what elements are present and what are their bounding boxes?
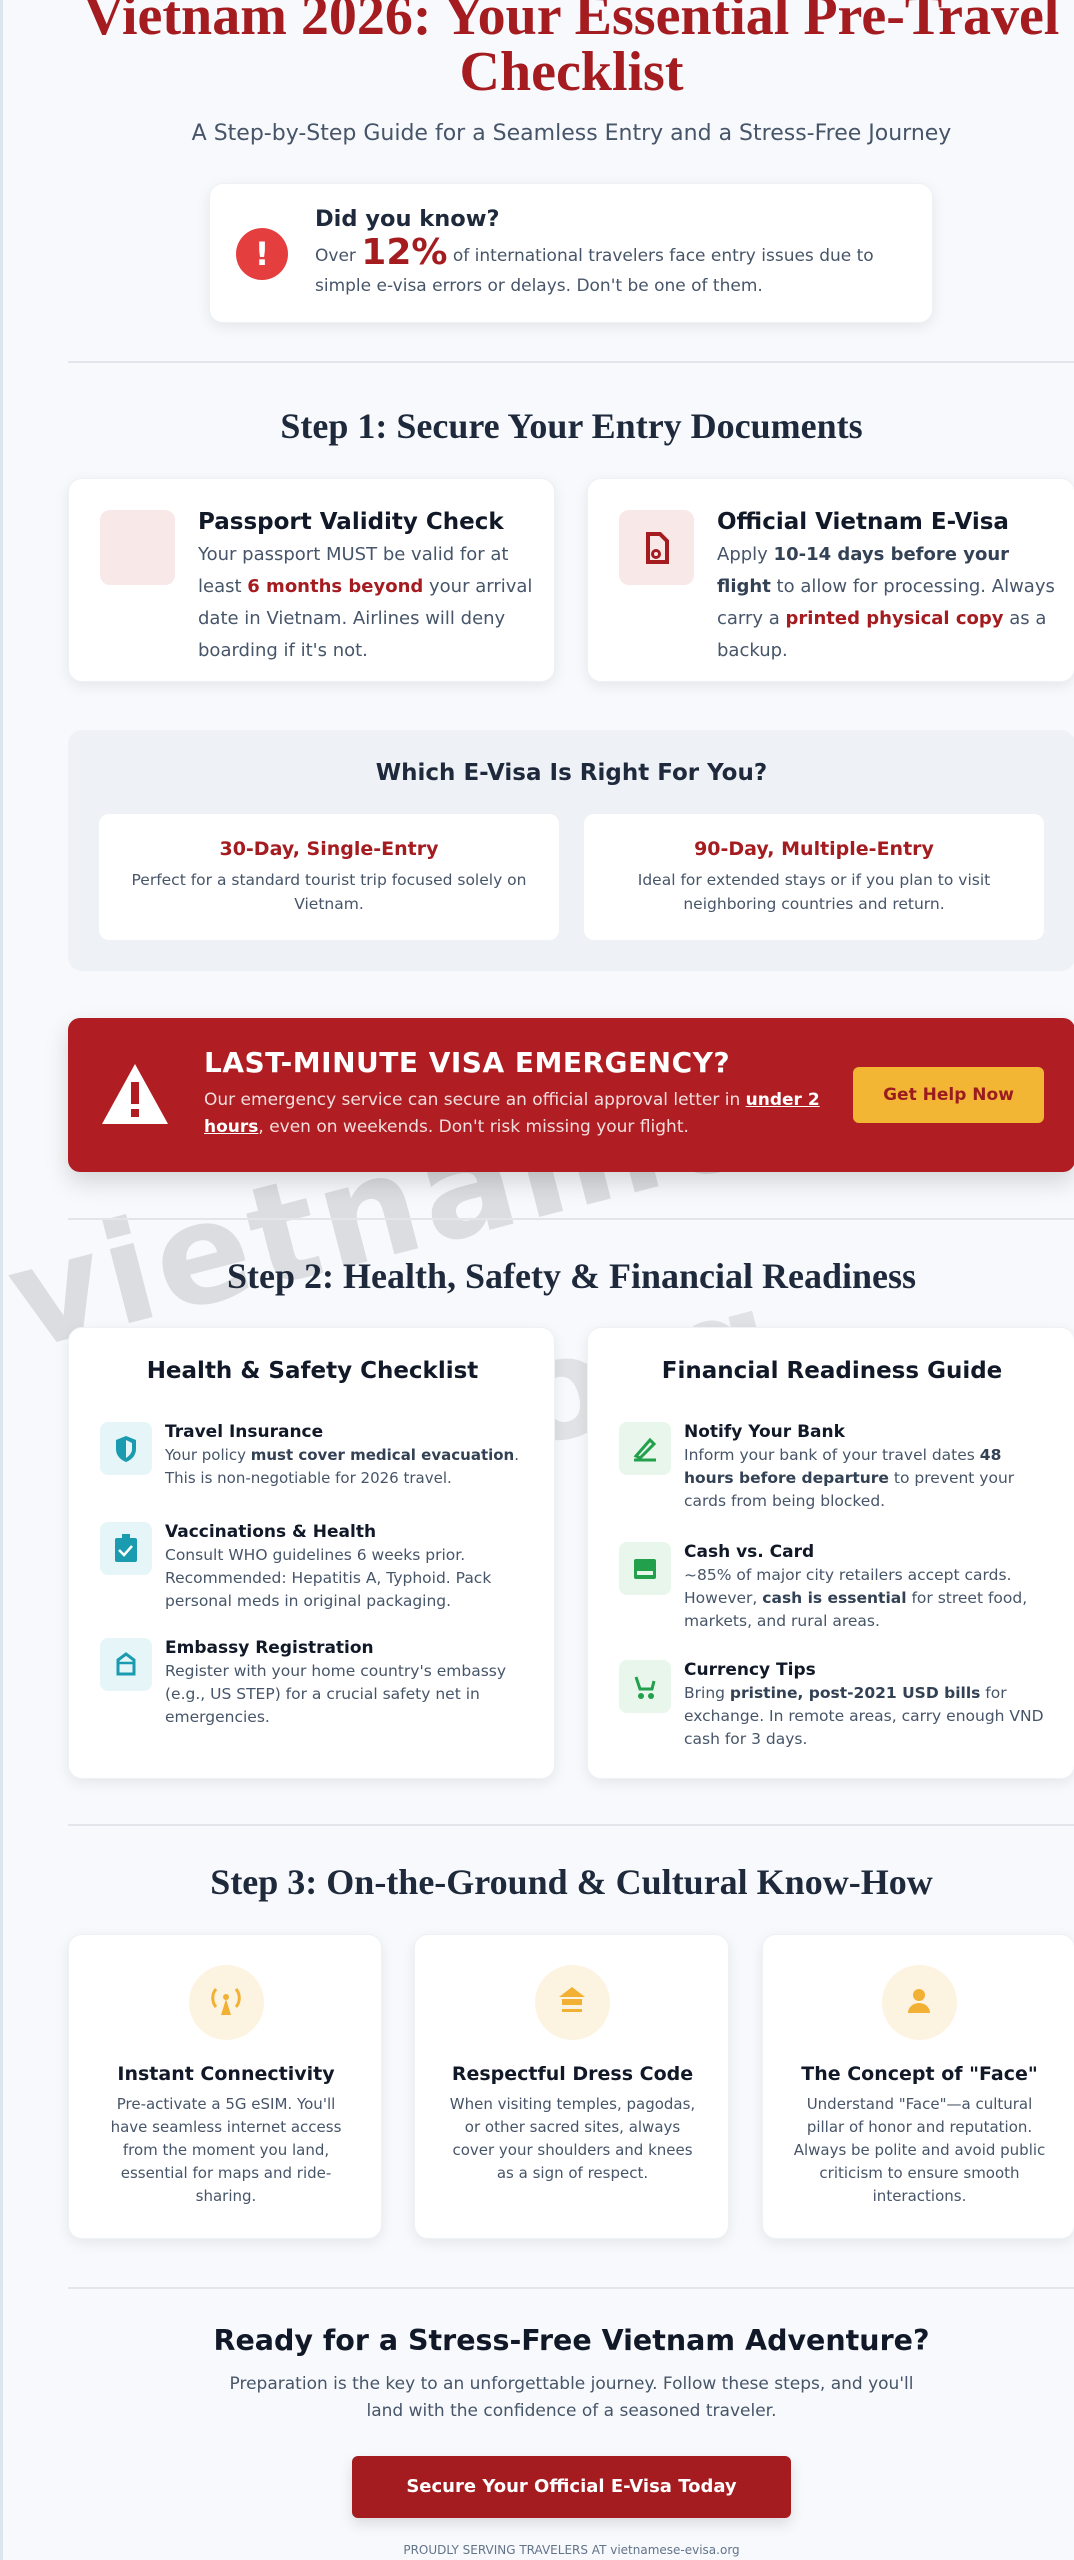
panel heading: Which E-Visa Is Right For You? (376, 760, 767, 786)
option: 90-day (584, 814, 1044, 940)
passport text: Passport Validity Check (198, 509, 504, 535)
item: embassy: Register with your home country's embassy (e.g., US STEP) for a crucial safety net in emergencies. (165, 1662, 506, 1726)
option: 30-day: Perfect for a standard tourist trip focused solely on Vietnam. (131, 871, 526, 913)
card: connectivity (68, 1934, 382, 2239)
option: 90-day: 90-Day, Multiple-Entry (694, 838, 934, 860)
face text: The Concept of "Face" (801, 2063, 1038, 2085)
item: bank: Inform your bank of your travel dates 48 hours before departure to prevent your cards from being blocked. (684, 1446, 1014, 1510)
item: bank: Notify Your Bank (684, 1422, 845, 1442)
connectivity text: Instant Connectivity (117, 2063, 335, 2085)
item: currency: Bring pristine, post-2021 USD bills for exchange. In remote areas, carry enough VND cash for 3 days. (684, 1684, 1044, 1748)
option: 30-day (99, 814, 559, 940)
heading: step 2: Step 2: Health, Safety & Financial Readiness (227, 1256, 916, 1296)
subtitle: A Step-by-Step Guide for a Seamless Entry and a Stress-Free Journey (192, 121, 951, 146)
panel: financial (587, 1327, 1074, 1779)
card: passport (68, 478, 555, 682)
panel: health (68, 1327, 555, 1779)
panel heading: Financial Readiness Guide (662, 1358, 1002, 1384)
text: evisa.org (43, 1257, 791, 1598)
emergency text: LAST-MINUTE VISA EMERGENCY? (204, 1046, 730, 1079)
callout: did you know (209, 183, 933, 323)
item: embassy (100, 1638, 506, 1726)
heading: closing: Ready for a Stress-Free Vietnam Adventure? (214, 2324, 930, 2357)
connectivity text: Pre-activate a 5G eSIM. You'll have seamless internet access from the moment you land, essential for maps and ride-sharing. (111, 2095, 341, 2205)
item: cash (619, 1542, 1027, 1630)
panel heading: Health & Safety Checklist (147, 1358, 478, 1384)
dress code text: Respectful Dress Code (452, 2063, 693, 2085)
callout text: Over 12% of international travelers face entry issues due to simple e-visa errors or delays. Don't be one of them. (315, 232, 874, 296)
icon: passport (100, 510, 175, 585)
item: currency: Currency Tips (684, 1660, 816, 1680)
button: get help: Get Help Now (883, 1085, 1014, 1105)
item: vaccinations: Vaccinations & Health (165, 1522, 376, 1542)
heading: step 1: Step 1: Secure Your Entry Documents (280, 406, 863, 446)
button: cta (352, 2456, 791, 2518)
button: get help (853, 1067, 1044, 1123)
watermark: vietnamese- (0, 970, 1018, 1383)
emergency banner (68, 1018, 1074, 1172)
item: cash: Cash vs. Card (684, 1542, 814, 1562)
emergency text (204, 1046, 820, 1137)
icon: warning triangle (102, 1064, 168, 1124)
icon: person (882, 1965, 957, 2040)
item: vaccinations: Consult WHO guidelines 6 weeks prior. Recommended: Hepatitis A, Typhoid. Pack personal meds in original packaging. (165, 1546, 491, 1610)
icon: alert: ! (255, 235, 269, 273)
e-visa text: Apply 10-14 days before your flight to allow for processing. Always carry a printed physical copy as a backup. (717, 544, 1055, 661)
icon: document (619, 510, 694, 585)
heading: step 3: Step 3: On-the-Ground & Cultural Know-How (210, 1862, 933, 1902)
footer: PROUDLY SERVING TRAVELERS AT vietnamese-evisa.org (403, 2543, 740, 2557)
closing text: Preparation is the key to an unforgettable journey. Follow these steps, and you'll land with the confidence of a seasoned traveler. (230, 2374, 913, 2421)
icon: alert (236, 228, 288, 280)
passport text: Your passport MUST be valid for at least 6 months beyond your arrival date in Vietnam. Airlines will deny boarding if it's not. (198, 544, 532, 661)
item: insurance: Travel Insurance (165, 1422, 323, 1442)
item: insurance: Your policy must cover medical evacuation. This is non-negotiable for 2026 travel. (165, 1446, 519, 1487)
option: 90-day: Ideal for extended stays or if you plan to visit neighboring countries and return. (638, 871, 990, 913)
item: cash: ~85% of major city retailers accept cards. However, cash is essential for street food, markets, and rural areas. (684, 1566, 1027, 1630)
item: embassy: Embassy Registration (165, 1638, 374, 1658)
icon: signal (189, 1965, 264, 2040)
card: face (762, 1934, 1074, 2239)
face text: Understand "Face"—a cultural pillar of honor and reputation. Always be polite and avoid public criticism to ensure smooth interactions. (794, 2095, 1045, 2205)
item: bank (619, 1422, 1014, 1510)
item: vaccinations (100, 1522, 492, 1610)
e-visa text: Official Vietnam E-Visa (717, 509, 1009, 535)
panel: which e-visa (68, 730, 1074, 971)
emergency text: Our emergency service can secure an official approval letter in under 2 hours, even on weekends. Don't risk missing your flight. (204, 1090, 820, 1137)
button: cta: Secure Your Official E-Visa Today (406, 2476, 737, 2497)
card: dress code (414, 1934, 729, 2239)
dress code text: When visiting temples, pagodas, or other sacred sites, always cover your shoulders and knees as a sign of respect. (450, 2095, 695, 2182)
callout text: Did you know? (315, 206, 500, 232)
icon: temple (535, 1965, 610, 2040)
option: 30-day: 30-Day, Single-Entry (219, 838, 439, 860)
card: e-visa (587, 478, 1074, 682)
item: insurance (100, 1422, 519, 1487)
item: currency (619, 1660, 1044, 1748)
